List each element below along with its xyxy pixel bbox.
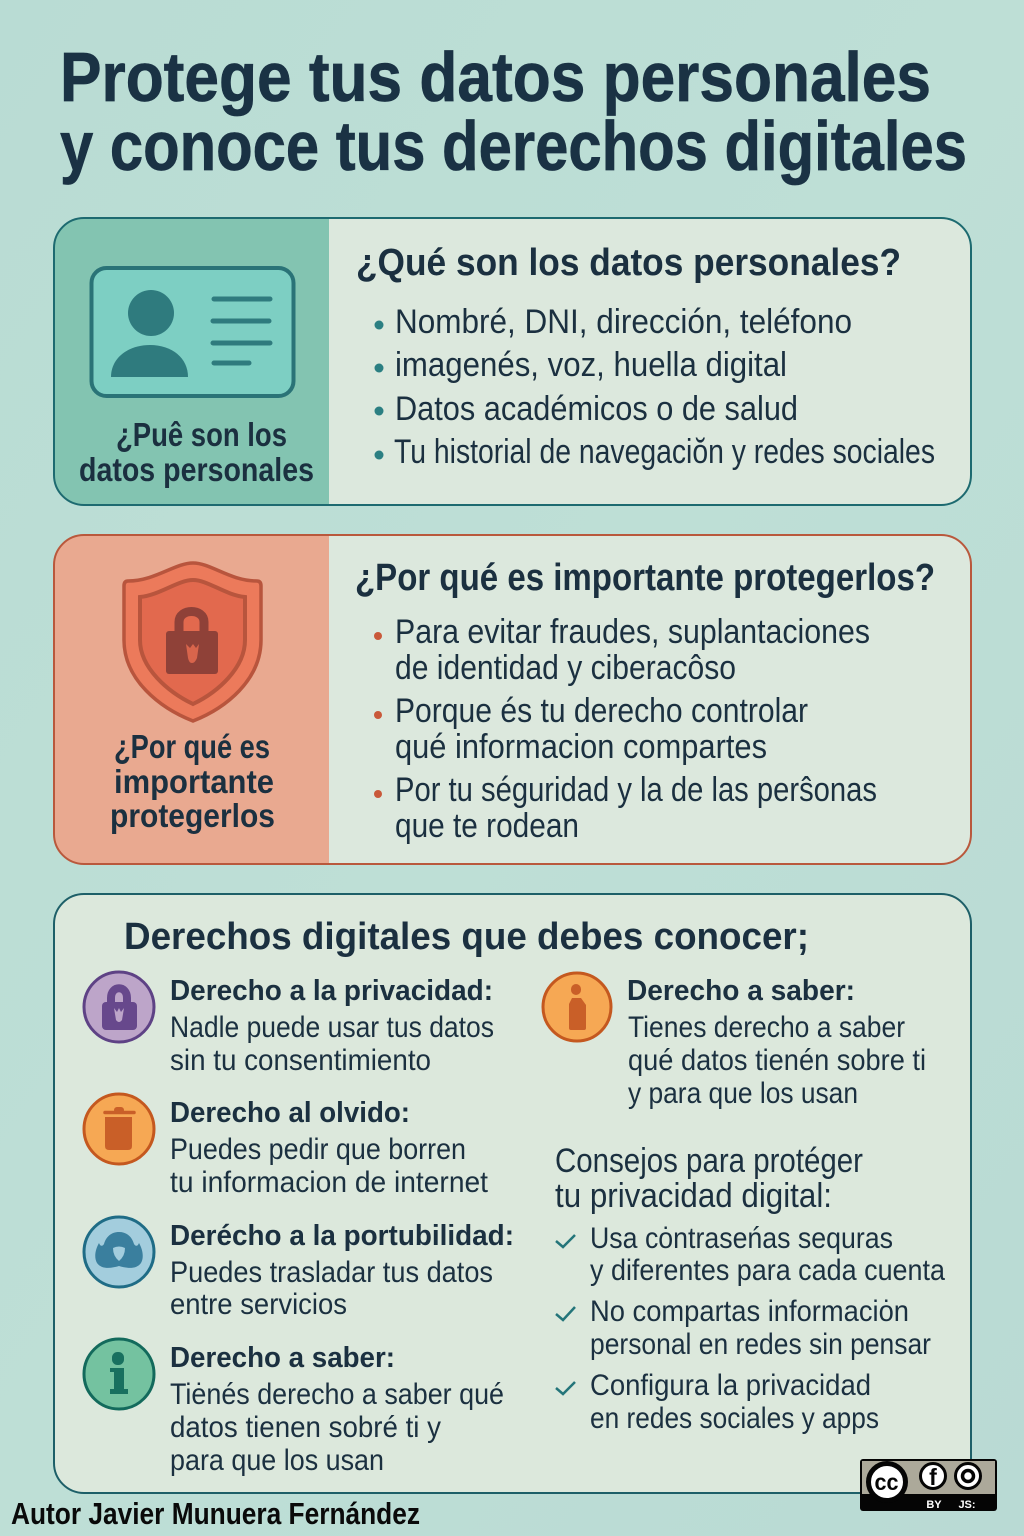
list: motivos: Para evitar fraudes, suplantaciones [395, 613, 870, 651]
label: card caption [79, 416, 314, 488]
list: motivos: Porque és tu derecho controlar [395, 692, 808, 730]
cc license badge: JS: [958, 1499, 976, 1511]
icon: orange info [543, 973, 611, 1041]
label: shield caption [110, 728, 275, 834]
list: consejos: Usa cȯntraseńas sequras [590, 1222, 893, 1255]
label: shield caption: ¿Por qué es [114, 728, 270, 765]
list: consejos: en redes sociales y apps [590, 1402, 879, 1435]
list: motivos: que te rodean [395, 807, 579, 845]
list: motivos: Por tu séguridad y la de las perŝonas [395, 771, 877, 809]
right: olvido: Puedes pedir que borren [170, 1133, 466, 1166]
right: privacidad [170, 975, 494, 1077]
cc license badge: f [929, 1464, 937, 1490]
list: motivos: qué informacion compartes [395, 728, 767, 766]
panel: derechos digitales [54, 894, 971, 1493]
right: olvido: tu informacion de internet [170, 1166, 489, 1199]
label: card caption: datos personales [79, 451, 314, 488]
right: olvido: Derecho al olvido: [170, 1097, 410, 1129]
title: Protege tus datos personales [60, 38, 931, 116]
icon: trash bin [84, 1094, 154, 1164]
list: tipos de datos: imagenés, voz, huella digital [395, 346, 787, 384]
right: saber izquierda [170, 1342, 504, 1477]
label: shield caption: protegerlos [110, 797, 275, 834]
heading: qué son: ¿Qué son los datos personales? [356, 242, 901, 284]
right: saber derecha: Tienes derecho a saber [628, 1011, 905, 1044]
author credit: Autor Javier Munuera Fernández [11, 1496, 420, 1531]
icon: cloud portability [84, 1217, 154, 1287]
panel: qué son los datos personales [54, 218, 971, 505]
cc license badge: BY [926, 1499, 942, 1511]
list: consejos: personal en redes sin pensar [590, 1328, 931, 1361]
list: tipos de datos: Datos académicos o de salud [395, 390, 798, 428]
right: privacidad: sin tu consentimiento [170, 1044, 431, 1077]
right: saber izquierda: Derecho a saber: [170, 1342, 395, 1374]
heading: consejos: tu privacidad digital: [555, 1177, 832, 1215]
right: portabilidad: Derécho a la portubilidad: [170, 1220, 514, 1252]
list: motivos [374, 613, 877, 845]
right: saber izquierda: datos tienen sobré ti y [170, 1411, 441, 1444]
panel: por qué protegerlos [54, 535, 971, 864]
right: saber derecha: qué datos tienén sobre ti [628, 1044, 926, 1077]
right: portabilidad: Puedes trasladar tus datos [170, 1256, 493, 1289]
label: card caption: ¿Puê son los [116, 416, 287, 453]
right: saber izquierda: para que los usan [170, 1444, 384, 1477]
list: tipos de datos [374, 303, 935, 471]
list: consejos: No compartas informaciȯn [590, 1295, 909, 1328]
heading: derechos digitales: Derechos digitales que debes conocer; [124, 916, 809, 958]
right: saber derecha [627, 975, 926, 1110]
right: privacidad: Nadle puede usar tus datos [170, 1011, 494, 1044]
list: consejos: y diferentes para cada cuenta [590, 1254, 945, 1287]
right: saber derecha: y para que los usan [628, 1077, 858, 1110]
cc license badge [860, 1459, 997, 1511]
heading: por qué: ¿Por qué es importante protegerlos? [355, 557, 935, 599]
icon: purple lock [84, 972, 154, 1042]
right: portabilidad [170, 1220, 514, 1321]
right: olvido [170, 1097, 489, 1199]
cc license badge: cc [874, 1469, 899, 1495]
list: motivos: de identidad y ciberacôso [395, 649, 736, 687]
heading: consejos [555, 1142, 863, 1215]
list: tipos de datos: Nombré, DNI, dirección, teléfono [395, 303, 852, 341]
right: saber derecha: Derecho a saber: [627, 975, 855, 1007]
right: saber izquierda: Tiėnés derecho a saber qué [170, 1378, 504, 1411]
list: tipos de datos: Tu historial de navegaciŏn y redes sociales [394, 433, 935, 471]
icon: id card [92, 268, 294, 396]
icon: shield with lock [124, 563, 261, 721]
label: shield caption: importante [114, 763, 274, 800]
right: privacidad: Derecho a la privacidad: [170, 975, 493, 1007]
list: consejos [556, 1222, 945, 1435]
title [60, 38, 967, 185]
list: consejos: Configura la privacidad [590, 1369, 871, 1402]
icon: info [84, 1339, 154, 1409]
heading: consejos: Consejos para protéger [555, 1142, 863, 1180]
right: portabilidad: entre servicios [170, 1288, 347, 1321]
